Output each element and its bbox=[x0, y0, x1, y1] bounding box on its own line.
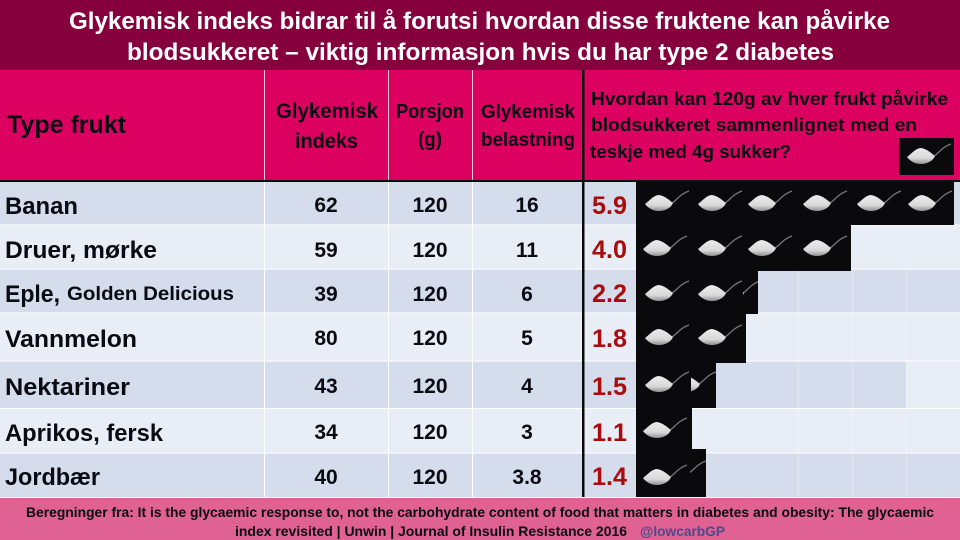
icon: 1.4 teaspoons bbox=[636, 449, 706, 497]
row: Eple, Golden Delicious: Golden Delicious bbox=[67, 284, 234, 305]
row: Eple, Golden Delicious bbox=[5, 270, 760, 314]
row: Druer, mørke bbox=[5, 225, 851, 271]
row: Jordbær bbox=[5, 449, 706, 497]
footer source note bbox=[0, 498, 960, 540]
row: Jordbær: 40 bbox=[314, 466, 338, 489]
row: Banan: Banan bbox=[5, 193, 78, 220]
table header row: indeks bbox=[295, 130, 358, 153]
row: Vannmelon: 1.8 bbox=[592, 325, 627, 353]
row: Nektariner bbox=[6, 363, 716, 408]
title banner bbox=[0, 0, 960, 70]
row: Nektariner: 1.5 bbox=[592, 373, 627, 401]
row: Druer, mørke: 59 bbox=[314, 239, 338, 262]
icon: 1.8 teaspoons bbox=[636, 313, 746, 363]
row: Banan: 16 bbox=[515, 194, 539, 217]
footer source note: @lowcarbGP bbox=[640, 523, 725, 539]
row: Vannmelon bbox=[5, 313, 746, 363]
row: Jordbær: Jordbær bbox=[5, 464, 100, 491]
row: Vannmelon: 80 bbox=[314, 327, 338, 350]
table header row bbox=[0, 70, 960, 180]
row: Druer, mørke: 4.0 bbox=[592, 236, 627, 264]
row: Banan: 62 bbox=[314, 194, 338, 217]
footer source note: index revisited | Unwin | Journal of Insulin Resistance 2016 bbox=[235, 523, 627, 539]
icon: 4.0 teaspoons bbox=[636, 225, 851, 271]
icon: 5.9 teaspoons bbox=[636, 181, 954, 226]
row: Aprikos, fersk bbox=[5, 408, 692, 453]
row: Nektariner: 43 bbox=[314, 375, 338, 398]
row: Eple, Golden Delicious: 39 bbox=[314, 283, 338, 306]
table header row: belastning bbox=[481, 130, 575, 151]
table header row: (g) bbox=[418, 129, 442, 151]
row: Jordbær: 3.8 bbox=[512, 466, 542, 489]
row: Eple, Golden Delicious: 2.2 bbox=[592, 280, 627, 308]
row: Eple, Golden Delicious: 6 bbox=[521, 283, 533, 306]
row: Vannmelon: 120 bbox=[412, 327, 448, 350]
row: Nektariner: Nektariner bbox=[5, 374, 130, 401]
table header row: Glykemisk bbox=[276, 100, 378, 123]
table header row: blodsukkeret sammenlignet med en bbox=[591, 115, 917, 135]
table header row: Porsjon bbox=[396, 101, 464, 123]
row: Banan bbox=[5, 181, 954, 226]
row: Aprikos, fersk: Aprikos, fersk bbox=[5, 420, 164, 447]
row: Jordbær: 1.4 bbox=[592, 463, 627, 491]
row: Aprikos, fersk: 34 bbox=[314, 421, 338, 444]
icon: 2.2 teaspoons bbox=[636, 270, 760, 314]
row: Jordbær: 120 bbox=[412, 466, 448, 489]
icon: 1.1 teaspoons bbox=[636, 408, 692, 453]
row: Aprikos, fersk: 1.1 bbox=[592, 419, 627, 447]
title banner: blodsukkeret – viktig informasjon hvis du har type 2 diabetes bbox=[127, 39, 834, 66]
table rules bbox=[0, 70, 960, 497]
table header row: Type frukt bbox=[7, 111, 127, 139]
row: Eple, Golden Delicious: Eple, bbox=[5, 281, 60, 308]
row: Aprikos, fersk: 120 bbox=[412, 421, 448, 444]
footer source note: Beregninger fra: It is the glycaemic response to, not the carbohydrate content of food that matters in diabetes and obesity: The glycaemic bbox=[26, 504, 934, 520]
row: Vannmelon: Vannmelon bbox=[5, 326, 137, 353]
row: Vannmelon: 5 bbox=[521, 327, 533, 350]
row: Aprikos, fersk: 3 bbox=[521, 421, 533, 444]
table header row: teskje med 4g sukker? bbox=[590, 142, 791, 162]
row backgrounds bbox=[0, 182, 960, 497]
row: Druer, mørke: 11 bbox=[516, 239, 538, 262]
title banner: Glykemisk indeks bidrar til å forutsi hvordan disse fruktene kan påvirke bbox=[69, 8, 890, 35]
row: Nektariner: 120 bbox=[412, 375, 448, 398]
row: Druer, mørke: Druer, mørke bbox=[5, 237, 157, 264]
table header row: Hvordan kan 120g av hver frukt påvirke bbox=[591, 89, 948, 109]
row: Banan: 120 bbox=[412, 194, 448, 217]
row: Banan: 5.9 bbox=[592, 192, 627, 220]
table header row: Glykemisk bbox=[481, 102, 575, 123]
row: Nektariner: 4 bbox=[521, 375, 533, 398]
row: Druer, mørke: 120 bbox=[412, 239, 448, 262]
icon: header teaspoon bbox=[899, 138, 954, 175]
icon: 1.5 teaspoons bbox=[636, 363, 716, 408]
row: Eple, Golden Delicious: 120 bbox=[412, 283, 448, 306]
